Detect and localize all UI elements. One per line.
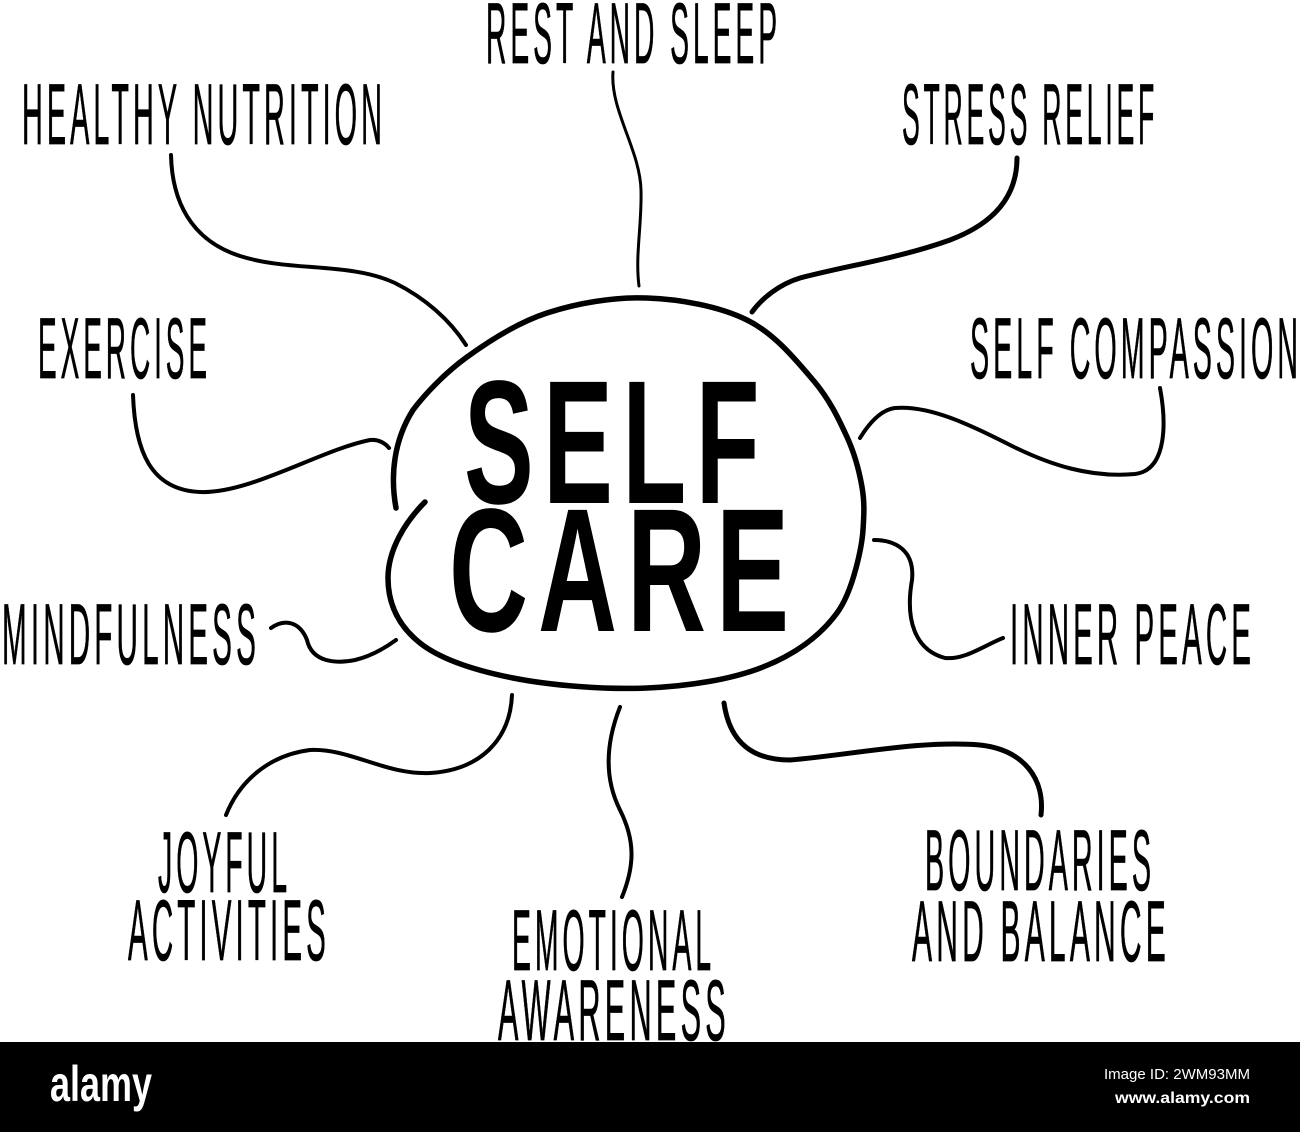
title: self care: CARE bbox=[449, 473, 799, 669]
footer url: www.alamy.com bbox=[1114, 1090, 1250, 1107]
label: boundaries and balance bbox=[912, 813, 1170, 980]
central blob outline bbox=[388, 298, 864, 688]
label: emotional awareness bbox=[498, 893, 730, 1059]
connector: exercise bbox=[133, 395, 389, 492]
connector: joyful activities bbox=[226, 695, 512, 815]
title: self care bbox=[449, 345, 799, 669]
connector: emotional awareness bbox=[609, 707, 632, 897]
connector: boundaries and balance bbox=[724, 703, 1041, 815]
text: HEALTHY NUTRITION bbox=[22, 67, 386, 163]
connector: healthy nutrition bbox=[171, 155, 466, 345]
connector: self compassion bbox=[860, 388, 1164, 475]
text: EXERCISE bbox=[38, 301, 211, 397]
text: EMOTIONAL bbox=[512, 893, 715, 989]
connector: mindfulness bbox=[271, 623, 396, 662]
label: joyful activities bbox=[128, 815, 330, 979]
footer bar bbox=[0, 1042, 1300, 1132]
text: AWARENESS bbox=[498, 963, 730, 1059]
text: JOYFUL bbox=[158, 815, 291, 911]
connector: stress relief bbox=[752, 158, 1017, 312]
footer image id: Image ID: 2WM93MM bbox=[1104, 1066, 1250, 1083]
connector: inner peace bbox=[874, 540, 1003, 658]
connector: rest and sleep bbox=[613, 72, 641, 286]
text: MINDFULNESS bbox=[2, 587, 260, 683]
footer logo: alamy: alamy bbox=[50, 1056, 152, 1112]
title: self care: SELF bbox=[464, 345, 769, 541]
text: ACTIVITIES bbox=[128, 883, 330, 979]
